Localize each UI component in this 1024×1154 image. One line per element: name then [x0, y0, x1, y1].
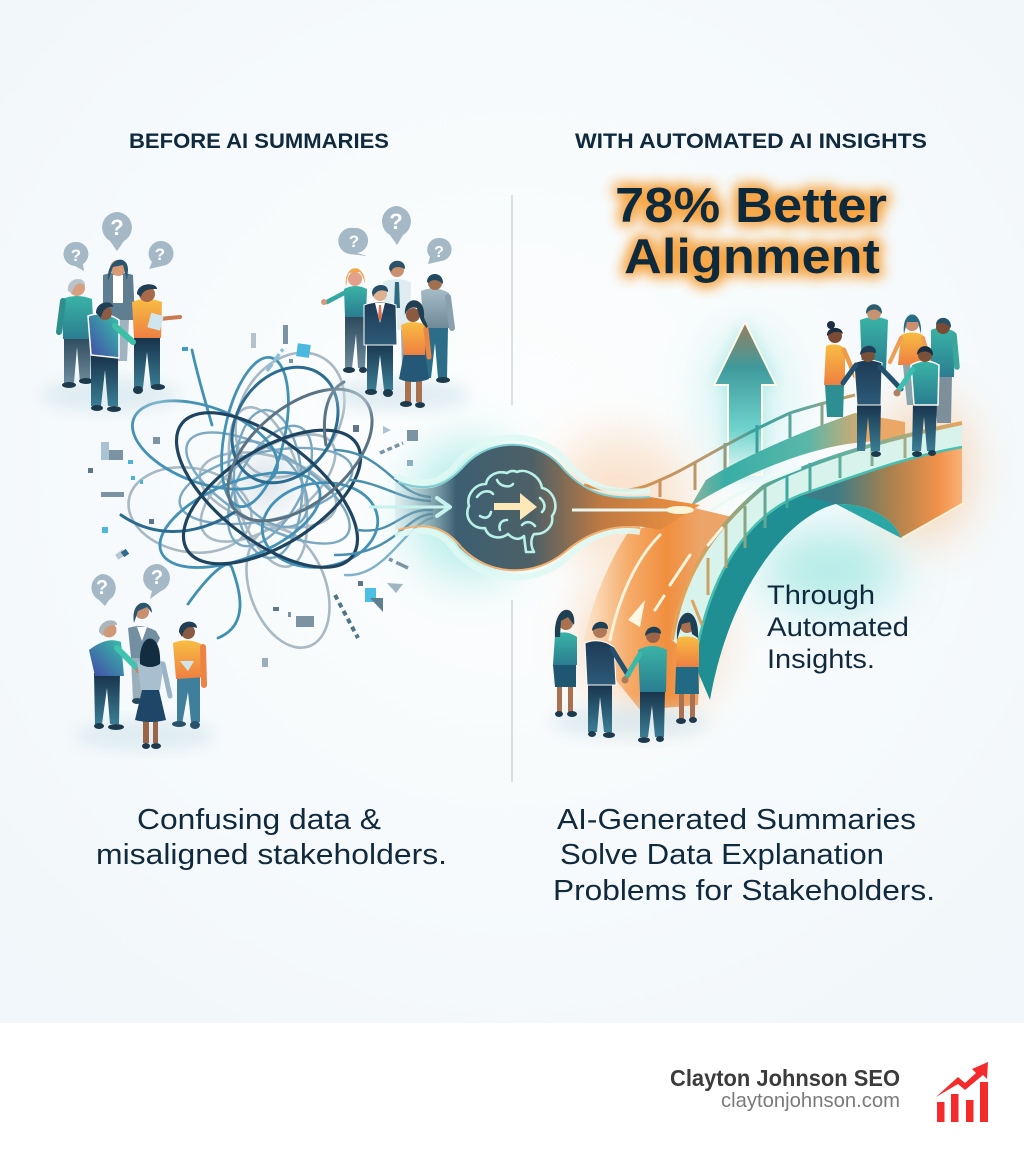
abutment — [836, 504, 901, 538]
person — [824, 321, 855, 417]
person — [622, 627, 667, 743]
glow behind flow and bridge — [410, 330, 970, 710]
person — [88, 302, 133, 412]
group: aligned stakeholders bottom — [550, 610, 710, 743]
text: through automated insights: Automated — [767, 612, 909, 642]
person — [321, 268, 367, 373]
person — [103, 260, 135, 361]
icon: question bubbles: ? — [96, 577, 108, 599]
group: aligned stakeholders on bridge — [824, 304, 957, 457]
back rail — [584, 395, 855, 497]
bridge: road forking to stakeholders — [584, 395, 964, 710]
text: through automated insights: Insights. — [767, 644, 875, 674]
person — [931, 318, 957, 423]
icon: red growth chart — [936, 1062, 988, 1122]
small up arrow on road — [628, 600, 645, 627]
headline stat: 78% better alignment — [615, 179, 887, 284]
icon: question bubbles: ? — [389, 209, 403, 234]
caption: after: Solve Data Explanation — [560, 839, 884, 871]
text: through automated insights: Through — [767, 580, 875, 610]
headline stat: 78% better alignment: 78% Better — [615, 179, 887, 233]
icon: question bubbles: ? — [110, 215, 124, 240]
front rail — [672, 423, 962, 660]
bridge deck — [690, 413, 905, 507]
headline stat: 78% better alignment: Alignment — [624, 230, 880, 284]
arrow inside brain — [494, 493, 537, 520]
person — [890, 314, 930, 405]
person — [172, 622, 206, 729]
person — [128, 603, 160, 704]
arch outer band — [695, 490, 836, 700]
caption: before: Confusing data & — [137, 804, 381, 836]
icon: question bubbles: ? — [151, 567, 163, 589]
person — [135, 638, 170, 749]
person — [860, 304, 888, 370]
person — [59, 279, 94, 388]
caption: after: Problems for Stakeholders. — [553, 875, 935, 907]
side panel with railing — [672, 423, 962, 660]
channel: AI processing node — [370, 438, 700, 578]
footer brand — [670, 1065, 900, 1112]
arrow: data in — [370, 498, 450, 516]
icon: question bubbles: ? — [71, 246, 81, 265]
chart: tangle of confusing data lines — [121, 333, 432, 659]
bridge end panel — [800, 447, 962, 538]
icon: brain with arrow — [467, 471, 555, 552]
footer brand: Clayton Johnson SEO — [670, 1065, 900, 1091]
icon: question bubbles — [91, 564, 170, 606]
center divider — [511, 195, 513, 782]
road: lower fork — [584, 507, 745, 710]
person — [585, 622, 628, 738]
person — [89, 620, 142, 730]
person — [553, 610, 577, 717]
person — [132, 284, 180, 394]
arrow: upward growth — [714, 322, 776, 475]
person — [675, 613, 699, 724]
caption: after — [553, 804, 935, 907]
person — [421, 274, 452, 383]
icon: question bubbles: ? — [434, 244, 444, 261]
road markings — [610, 468, 800, 640]
caption: after: AI-Generated Summaries — [557, 804, 916, 836]
icon: question bubbles — [338, 206, 452, 264]
flow lines into the channel — [335, 450, 432, 575]
person — [399, 300, 429, 408]
footer panel — [0, 1023, 1024, 1154]
person — [843, 346, 901, 457]
heading: before: BEFORE AI SUMMARIES — [129, 130, 389, 153]
icon: question bubbles: ? — [155, 245, 165, 264]
icon: question bubbles — [63, 212, 174, 271]
text: through automated insights — [767, 580, 909, 674]
group: confused stakeholders top left — [40, 212, 180, 412]
arrow: data out — [570, 506, 694, 514]
heading: with AI: WITH AUTOMATED AI INSIGHTS — [575, 130, 927, 153]
person — [383, 261, 414, 368]
caption: before: misaligned stakeholders. — [96, 839, 447, 871]
icon: question bubbles: ? — [349, 232, 359, 251]
caption: before — [96, 804, 447, 871]
person — [894, 346, 939, 457]
footer brand: claytonjohnson.com — [721, 1090, 900, 1112]
person — [364, 285, 397, 397]
group: confused stakeholders bottom left — [75, 564, 215, 750]
scattered data fragments — [88, 325, 418, 667]
group: confused stakeholders top right — [321, 206, 470, 411]
